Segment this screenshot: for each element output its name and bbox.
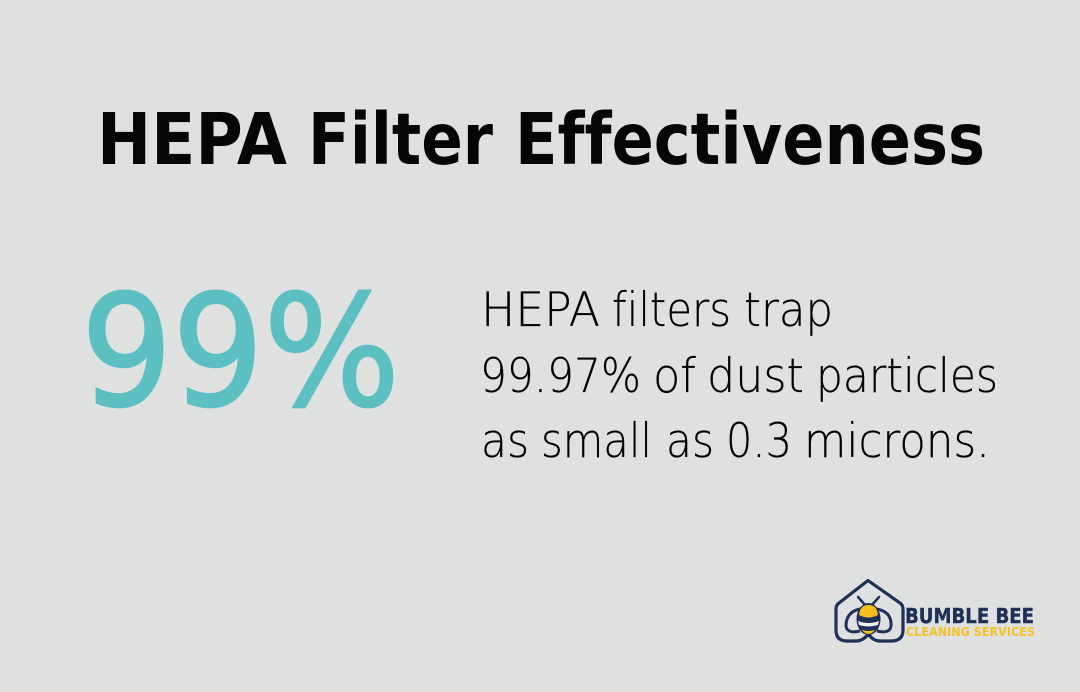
logo wordmark: BUMBLE BEE xyxy=(905,604,1034,628)
description text: particles xyxy=(816,349,998,404)
logo tagline: CLEANING SERVICES xyxy=(906,625,1035,639)
title: Filter xyxy=(308,98,493,181)
title: Effectiveness xyxy=(515,98,985,181)
description text: microns. xyxy=(804,414,990,469)
description text: HEPA xyxy=(481,283,600,338)
description text: as xyxy=(666,414,714,469)
description text: as xyxy=(481,414,529,469)
logo: Bumble Bee Cleaning Services xyxy=(836,580,1035,641)
description text: trap xyxy=(744,283,833,338)
description text: filters xyxy=(612,283,731,338)
icon: house outline with bee xyxy=(836,580,903,641)
description text: of xyxy=(653,349,696,404)
description text: 0.3 xyxy=(726,414,792,469)
title: HEPA xyxy=(97,98,287,181)
description text xyxy=(480,283,998,469)
description text: dust xyxy=(707,349,804,404)
description text: small xyxy=(541,414,652,469)
big statistic: 99%: 99% xyxy=(81,263,400,442)
description text: 99.97% xyxy=(480,349,641,404)
title xyxy=(97,98,985,181)
